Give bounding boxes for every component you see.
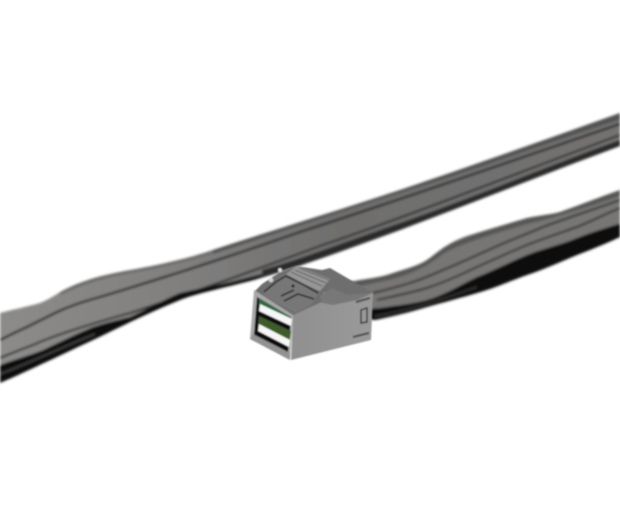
connector: white contact strips <box>259 304 292 326</box>
connector: rear shell and latch <box>254 266 373 316</box>
connector: side window and slots <box>361 308 367 323</box>
upper cable: long run to lower left <box>0 100 620 400</box>
connector <box>250 266 373 360</box>
connector: front face <box>250 290 293 360</box>
connector: side wall <box>291 290 373 360</box>
product photo: cable with connector <box>0 112 620 384</box>
connector: green circuit boards <box>259 298 291 322</box>
lower cable: right branch <box>351 188 620 322</box>
